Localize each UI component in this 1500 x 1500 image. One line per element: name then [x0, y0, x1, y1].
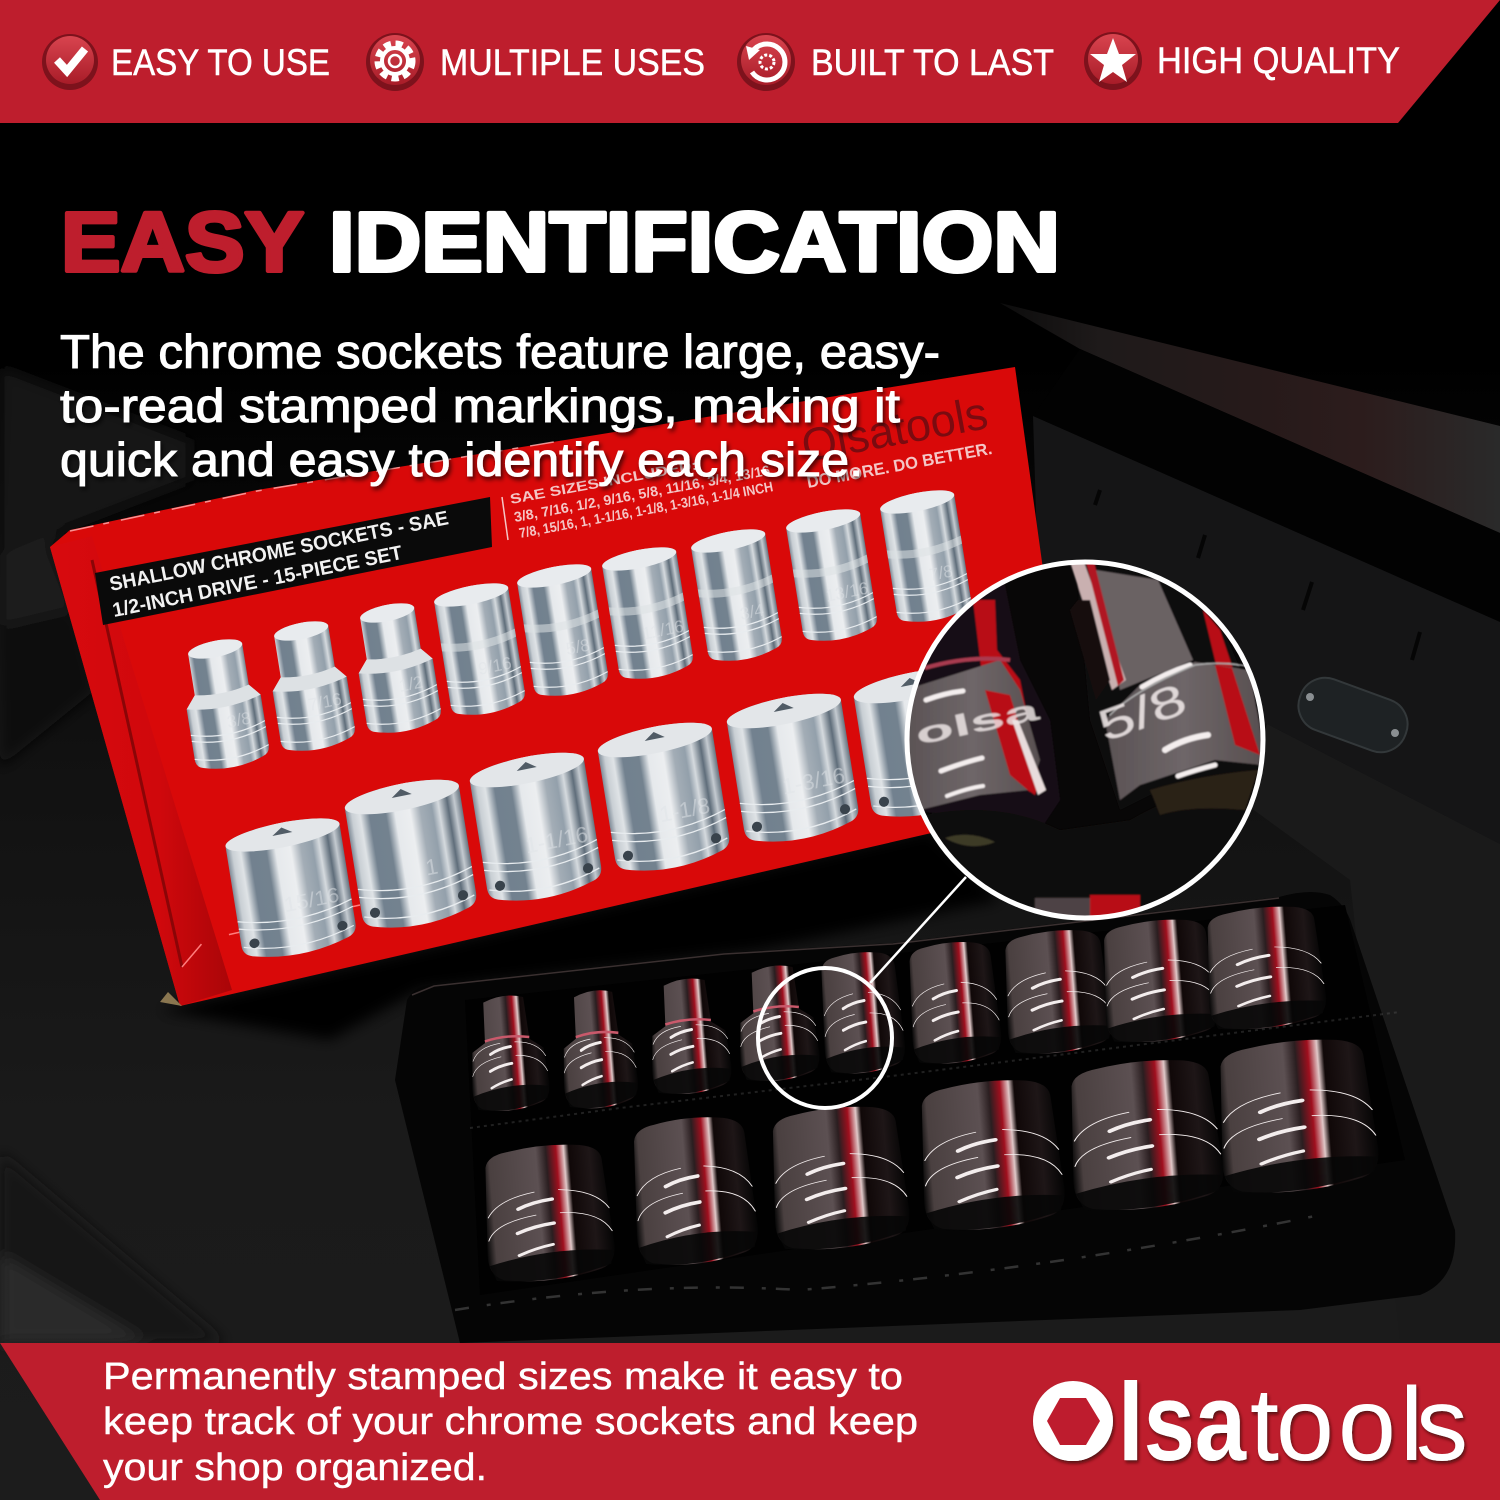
- socket tray: [395, 892, 1455, 1343]
- footer text: keep track of your chrome sockets and keep: [103, 1401, 918, 1443]
- feature: high quality: [1084, 32, 1400, 90]
- lens: right socket: 5/8: [1092, 675, 1193, 751]
- callout: small ring and leader line: [758, 877, 966, 1108]
- Olsatools logo: [1033, 1361, 1468, 1484]
- box sizes list: 7/8, 15/16, 1, 1-1/16, 1-1/8, 1-3/16, 1-1/4 INCH: [518, 478, 774, 541]
- feature: built to last: BUILT TO LAST: [811, 42, 1054, 83]
- mounting plate: [1291, 670, 1415, 760]
- feature: built to last: [737, 33, 1054, 91]
- box logo: Olsatools: [797, 386, 992, 472]
- box sockets: 1-1/16: [524, 821, 590, 859]
- feature: easy to use: EASY TO USE: [111, 42, 330, 83]
- box logo: DO MORE. DO BETTER.: [805, 439, 994, 492]
- box title banner: [95, 497, 492, 625]
- body text: [60, 325, 940, 486]
- product box: [50, 367, 1075, 1006]
- Olsatools logo: tools: [1250, 1367, 1468, 1483]
- box sockets: 1: [424, 853, 440, 881]
- lens: left socket: [910, 584, 1060, 824]
- box title banner: SHALLOW CHROME SOCKETS - SAE: [108, 507, 450, 596]
- box sockets: 3/4: [739, 599, 766, 624]
- feature: high quality: HIGH QUALITY: [1157, 40, 1400, 81]
- top banner: [0, 0, 1500, 123]
- feature: multiple uses: [366, 33, 705, 91]
- body text: to-read stamped markings, making it: [60, 379, 900, 432]
- body text: The chrome sockets feature large, easy-: [60, 325, 940, 378]
- box sockets: 7/8: [928, 560, 954, 585]
- feature: multiple uses: MULTIPLE USES: [440, 42, 705, 83]
- box sockets: 11/16: [641, 616, 685, 644]
- feature: easy to use: [42, 34, 330, 90]
- box sockets: 5/8: [565, 634, 591, 659]
- box sockets: 15/16: [282, 882, 341, 917]
- headline: IDENTIFICATION: [329, 195, 1060, 289]
- lens: left socket: olsa: [913, 693, 1042, 752]
- box sockets: 13/16: [824, 578, 870, 606]
- box sockets: [177, 486, 988, 965]
- tray top row sockets: [465, 902, 1328, 1114]
- headline: [61, 195, 1060, 289]
- box sockets: 3/8: [226, 707, 252, 732]
- Olsatools logo: lsa: [1118, 1361, 1247, 1484]
- box sockets: 9/16: [477, 653, 513, 679]
- footer text: [103, 1356, 918, 1489]
- box sizes list: 3/8, 7/16, 1/2, 9/16, 5/8, 11/16, 3/4, 13/16: [513, 462, 771, 525]
- box sockets: 1-1/8: [658, 793, 712, 827]
- footer text: Permanently stamped sizes make it easy to: [103, 1356, 903, 1398]
- footer text: your shop organized.: [103, 1447, 487, 1489]
- callout: magnified view: [905, 560, 1263, 925]
- Olsatools logo: O: [1034, 1362, 1112, 1483]
- body text: quick and easy to identify each size.: [60, 433, 863, 486]
- box title banner: 1/2-INCH DRIVE - 15-PIECE SET: [111, 542, 404, 622]
- box sockets: 7/16: [307, 689, 343, 715]
- bottom banner: [0, 1343, 1500, 1500]
- box sockets: 1-3/16: [781, 762, 847, 800]
- box sockets: 1/2: [398, 671, 424, 696]
- box sizes list: SAE SIZES INCLUDED:: [509, 457, 698, 507]
- lens: right socket: [1070, 560, 1262, 810]
- tray bottom row sockets: [479, 1033, 1381, 1286]
- headline: EASY: [61, 195, 304, 289]
- left shelf shading: [0, 367, 225, 1343]
- shadow below box: [160, 830, 1000, 1040]
